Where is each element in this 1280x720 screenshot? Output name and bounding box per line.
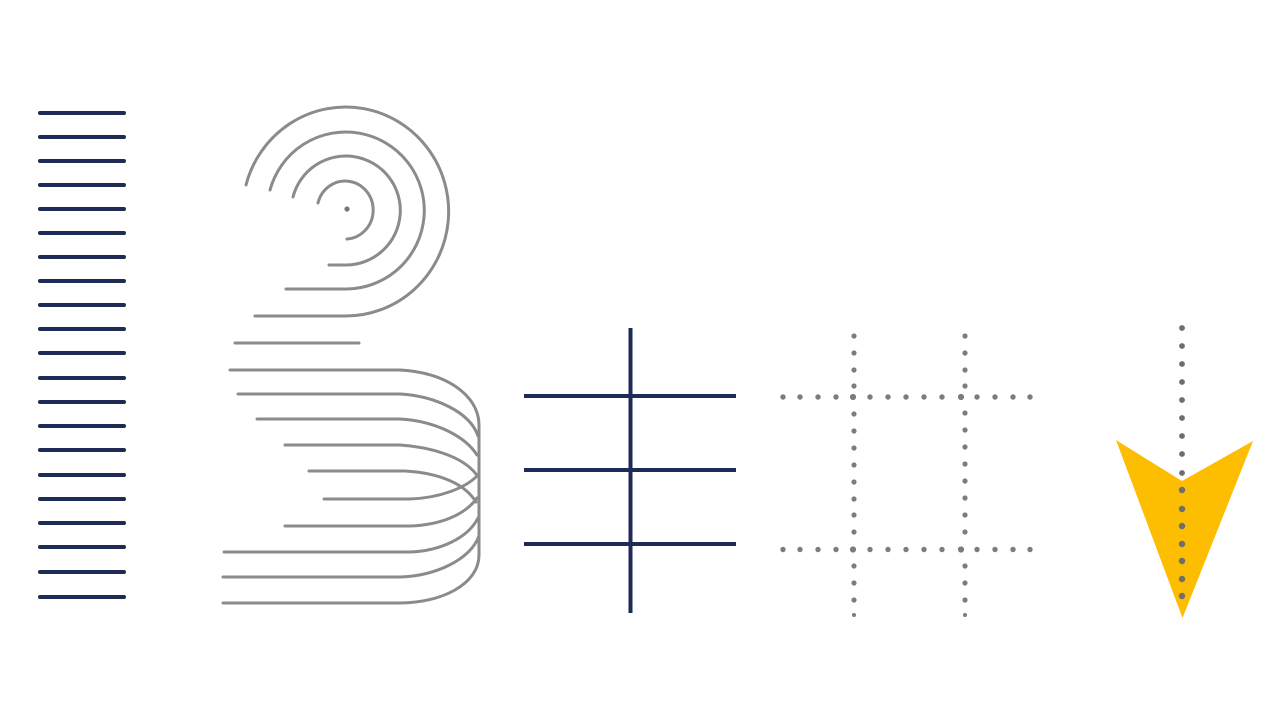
dotted vertical line through arrowhead xyxy=(1179,325,1185,599)
grey converging curved lines xyxy=(223,343,479,603)
grey concentric spiral arcs xyxy=(246,107,449,316)
dotted grey grid xyxy=(780,333,1033,617)
icon: yellow arrowhead xyxy=(1116,440,1253,618)
navy cross with three horizontal bars xyxy=(524,328,736,613)
navy stacked horizontal bars xyxy=(40,113,124,597)
